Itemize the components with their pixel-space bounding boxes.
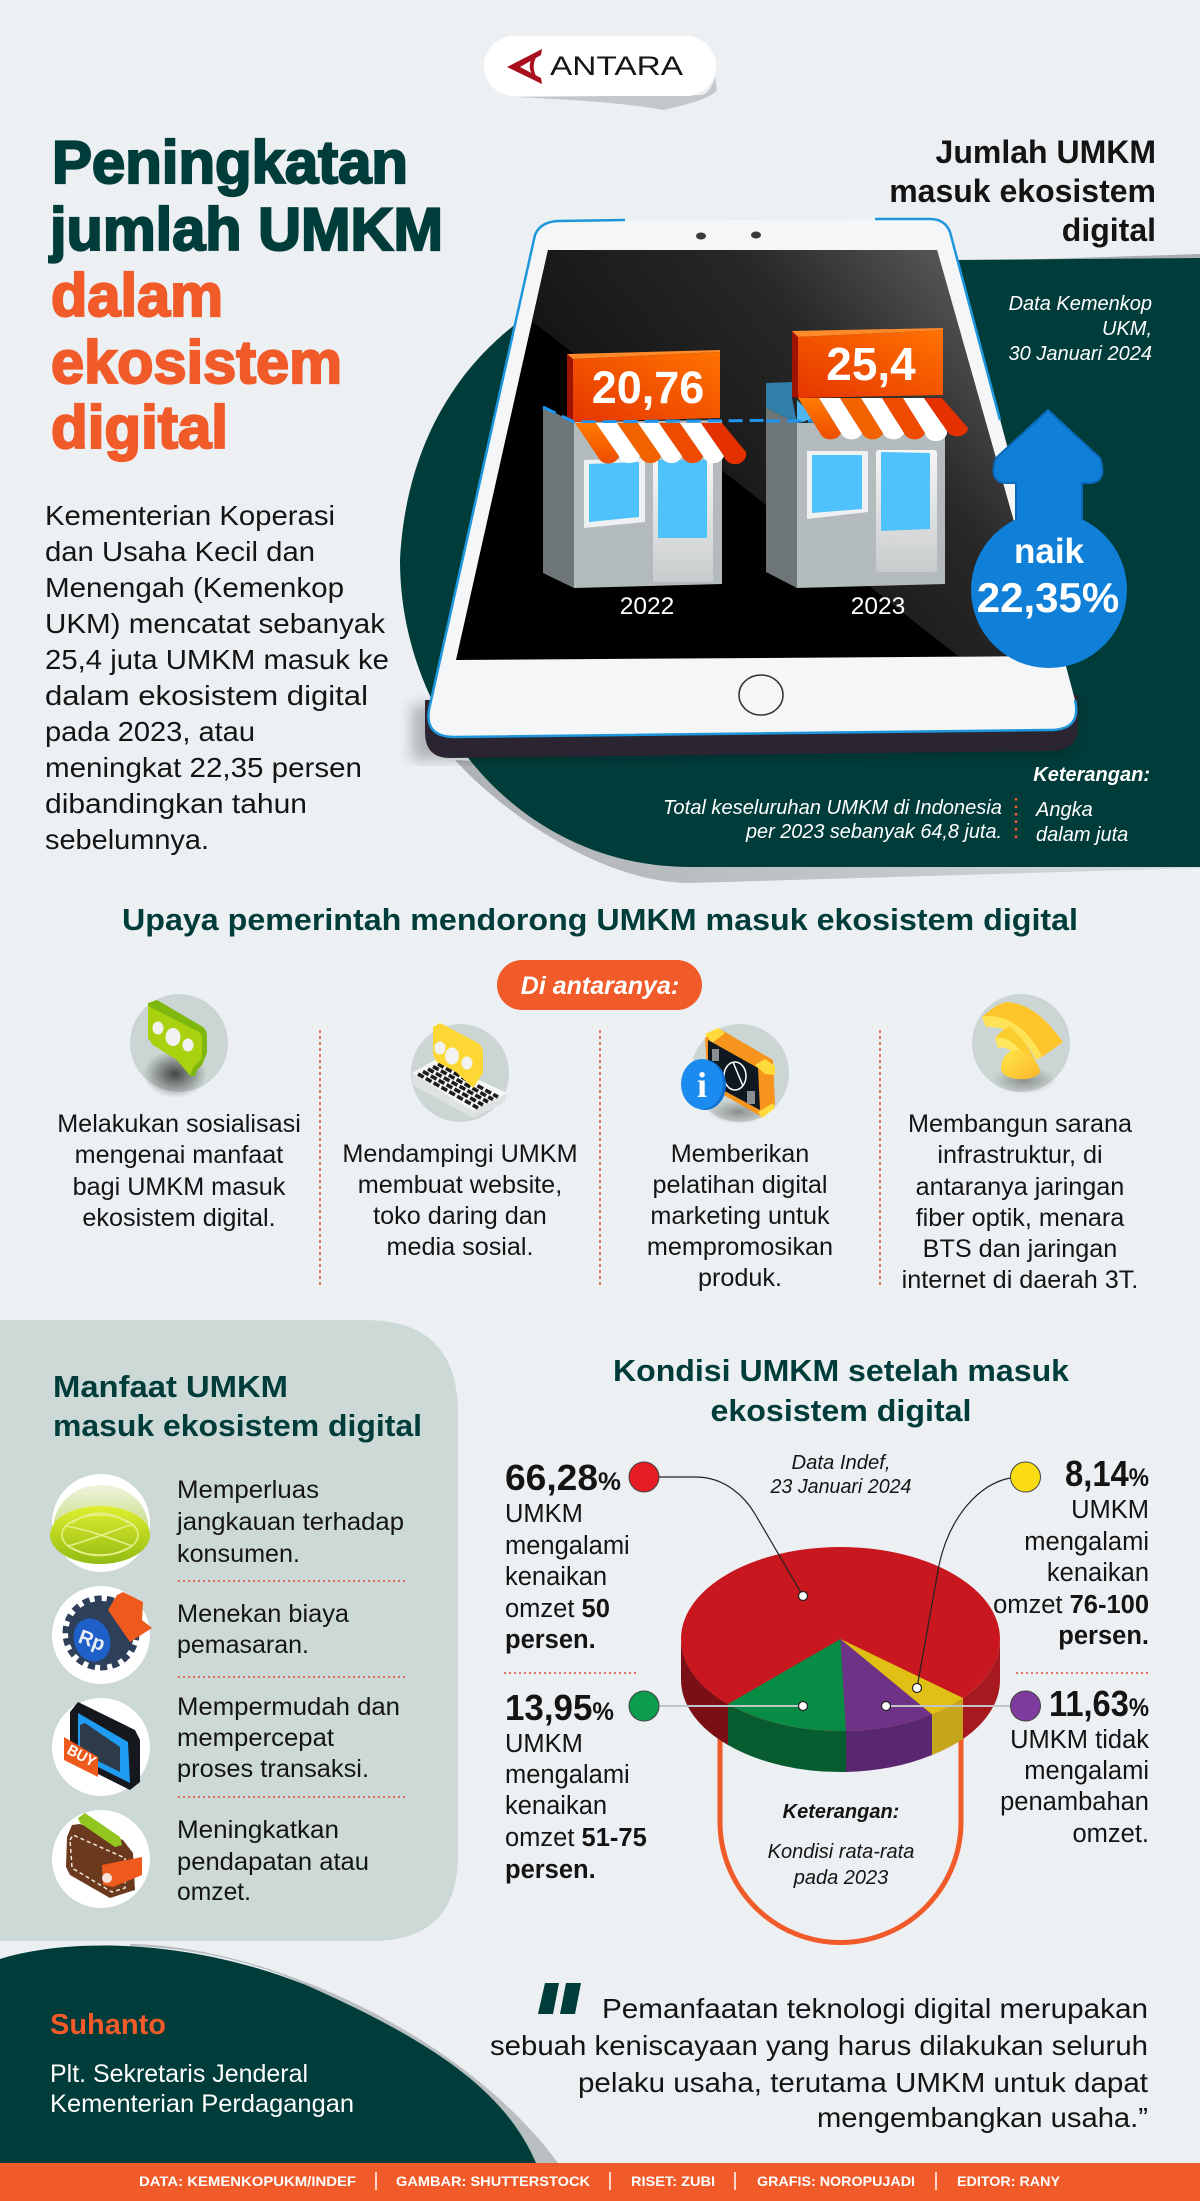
intro paragraph: Menengah (Kemenkop — [45, 572, 344, 603]
legend note — [663, 764, 1150, 846]
year: 2023: 2023 — [851, 593, 905, 620]
text: sosialisasi: mengenai manfaat — [75, 1141, 283, 1169]
text: website: membuat website, — [358, 1171, 562, 1199]
footer credits: EDITOR: RANY — [957, 2173, 1061, 2189]
orange legend loop: Keterangan: — [783, 1801, 899, 1823]
intro paragraph: Kementerian Koperasi — [45, 500, 335, 531]
stat: 8,14%: 8,14% — [1065, 1453, 1149, 1494]
source: indef: Data Indef, — [792, 1452, 890, 1474]
source note: Data Kemenkop — [1009, 293, 1152, 315]
main title — [49, 129, 443, 461]
heading: kondisi UMKM — [613, 1353, 1070, 1428]
intro paragraph: dibandingkan tahun — [45, 788, 307, 819]
stat: 13,95%: mengalami — [505, 1761, 630, 1789]
stat: 8,14%: omzet 76-100 — [993, 1591, 1149, 1619]
text: website — [342, 1140, 578, 1261]
chart heading: jumlah UMKM: masuk ekosistem — [889, 173, 1156, 209]
store: 2022 — [543, 350, 815, 620]
callout: naik 22,35%: 22,35% — [977, 574, 1119, 621]
section heading: upaya pemerintah: Upaya pemerintah mendorong UMKM masuk ekosistem digital — [122, 902, 1078, 937]
stat: 11,63% — [1000, 1683, 1149, 1848]
text: biaya: Menekan biaya — [177, 1600, 349, 1628]
text: pelatihan: produk. — [698, 1264, 782, 1292]
orange legend loop — [720, 1730, 961, 1943]
intro paragraph: UKM) mencatat sebanyak — [45, 608, 386, 639]
icon: globe — [50, 1474, 150, 1572]
value: 25,4: 25,4 — [826, 338, 916, 390]
text: infrastruktur — [902, 1110, 1138, 1294]
main title: digital — [51, 394, 228, 461]
chart heading: jumlah UMKM — [889, 134, 1156, 248]
icon: wallet — [52, 1810, 150, 1908]
year: 2022: 2022 — [620, 593, 674, 620]
intro paragraph — [45, 500, 389, 855]
text: pelatihan: marketing untuk — [650, 1202, 830, 1230]
stat: 8,14%: UMKM — [1071, 1496, 1149, 1524]
legend note: per 2023 sebanyak 64,8 juta. — [745, 821, 1002, 843]
stat: 8,14%: mengalami — [1024, 1528, 1149, 1556]
stat: 13,95%: omzet 51-75 — [505, 1824, 647, 1852]
stat: 66,28%: kenaikan — [505, 1563, 607, 1591]
speaker role — [50, 2060, 354, 2118]
footer credits: DATA: KEMENKOPUKM/INDEF — [139, 2173, 356, 2189]
stat: 66,28%: UMKM — [505, 1500, 583, 1528]
text: pelatihan: mempromosikan — [647, 1233, 833, 1261]
text: sosialisasi: bagi UMKM masuk — [73, 1173, 286, 1201]
stat: 11,63%: omzet. — [1072, 1820, 1149, 1848]
speaker role: Plt. Sekretaris Jenderal — [50, 2060, 308, 2088]
text: website: toko daring dan — [373, 1202, 547, 1230]
icon: digital marketing board: i — [697, 1065, 707, 1105]
stat: 11,63%: penambahan — [1000, 1788, 1149, 1816]
footer credits — [0, 2163, 1200, 2201]
icon: rupiah gear: Rp — [75, 1626, 108, 1656]
store: 2023 — [766, 328, 968, 620]
footer credits: RISET: ZUBI — [631, 2173, 715, 2189]
text: infrastruktur: internet di daerah 3T. — [902, 1266, 1138, 1294]
stat: 8,14% — [993, 1453, 1149, 1650]
source: indef: 23 Januari 2024 — [770, 1476, 912, 1498]
legend note: Keterangan: — [1033, 764, 1150, 786]
stat: 8,14%: kenaikan — [1047, 1559, 1149, 1587]
stat: 66,28%: mengalami — [505, 1532, 630, 1560]
stat: 66,28%: omzet 50 — [505, 1595, 610, 1623]
stat: 66,28%: persen. — [505, 1626, 596, 1654]
text: omzet: pendapatan atau — [177, 1848, 369, 1876]
stat: 11,63%: mengalami — [1024, 1757, 1149, 1785]
text: jangkauan: jangkauan terhadap — [176, 1508, 404, 1536]
text: biaya — [177, 1600, 349, 1659]
text: transaksi: mempercepat — [177, 1724, 334, 1752]
text: sosialisasi: ekosistem digital. — [82, 1204, 276, 1232]
stat: 13,95%: 13,95% — [505, 1687, 614, 1728]
icon: keyboard and bubble — [411, 1023, 509, 1122]
heading: manfaat: Manfaat UMKM — [53, 1369, 288, 1404]
speaker name: Suhanto — [50, 2009, 166, 2041]
pie chart — [681, 1547, 1000, 1772]
icon: chat bubble — [130, 994, 228, 1098]
text: infrastruktur: infrastruktur, di — [937, 1141, 1103, 1169]
text: transaksi: Mempermudah dan — [177, 1693, 400, 1721]
intro paragraph: 25,4 juta UMKM masuk ke — [45, 644, 389, 675]
legend note: Angka — [1035, 799, 1093, 821]
text: transaksi: proses transaksi. — [177, 1755, 369, 1783]
stat: 13,95% — [505, 1687, 659, 1884]
text: website: Mendampingi UMKM — [342, 1140, 578, 1168]
legend note: Total keseluruhan UMKM di Indonesia — [663, 797, 1002, 819]
footer credits: GAMBAR: SHUTTERSTOCK — [396, 2173, 590, 2189]
icon: phone and buy tag: BUY — [64, 1742, 99, 1771]
leader lines — [659, 1477, 1010, 1710]
chart heading: jumlah UMKM: digital — [1062, 212, 1156, 248]
source note: UKM, — [1102, 318, 1152, 340]
footer credits: GRAFIS: NOROPUJADI — [757, 2173, 915, 2189]
main title: jumlah UMKM — [49, 196, 443, 263]
main title: ekosistem — [51, 329, 342, 396]
text: infrastruktur: fiber optik, menara — [916, 1204, 1125, 1232]
orange legend loop: pada 2023 — [793, 1867, 888, 1889]
text: jangkauan — [176, 1476, 404, 1568]
text: website: media sosial. — [386, 1233, 534, 1261]
logo: Antara: ANTARA — [550, 51, 683, 81]
text: sosialisasi: Melakukan sosialisasi — [57, 1110, 301, 1138]
intro paragraph: dalam ekosistem digital — [45, 680, 368, 711]
value: 20,76: 20,76 — [592, 362, 704, 413]
icon: quote mark — [538, 1983, 581, 2014]
callout: naik 22,35%: naik — [1014, 532, 1085, 571]
heading: kondisi UMKM: ekosistem digital — [710, 1393, 972, 1428]
pill: di antaranya: Di antaranya: — [521, 972, 679, 1000]
text: omzet — [177, 1816, 369, 1906]
text: pelatihan: pelatihan digital — [652, 1171, 828, 1199]
heading: manfaat — [53, 1369, 422, 1443]
intro paragraph: dan Usaha Kecil dan — [45, 536, 315, 567]
quote text: pelaku usaha, terutama UMKM untuk dapat — [578, 2067, 1148, 2098]
intro paragraph: sebelumnya. — [45, 824, 209, 855]
stat: 13,95%: kenaikan — [505, 1792, 607, 1820]
speaker role: Kementerian Perdagangan — [50, 2090, 354, 2118]
text: jangkauan: Memperluas — [177, 1476, 319, 1504]
icon: wifi — [972, 994, 1070, 1094]
quote text — [490, 1993, 1148, 2133]
icon: digital marketing board — [681, 1024, 789, 1124]
text: infrastruktur: BTS dan jaringan — [923, 1235, 1117, 1263]
quote text: sebuah keniscayaan yang harus dilakukan seluruh — [490, 2030, 1148, 2061]
text: biaya: pemasaran. — [177, 1631, 309, 1659]
stat: 13,95%: persen. — [505, 1856, 596, 1884]
quote text: Pemanfaatan teknologi digital merupakan — [602, 1993, 1148, 2024]
icon: rupiah gear — [52, 1586, 152, 1684]
stat: 13,95%: UMKM — [505, 1730, 583, 1758]
icon: phone and buy tag — [52, 1698, 150, 1796]
heading: manfaat: masuk ekosistem digital — [53, 1408, 422, 1443]
text: pelatihan: Memberikan — [671, 1140, 809, 1168]
chart heading: jumlah UMKM: Jumlah UMKM — [936, 134, 1156, 170]
intro paragraph: meningkat 22,35 persen — [45, 752, 362, 783]
panel: speaker — [0, 1944, 558, 2163]
text: infrastruktur: Membangun sarana — [908, 1110, 1133, 1138]
text: infrastruktur: antaranya jaringan — [916, 1173, 1124, 1201]
logo: Antara — [484, 36, 717, 110]
stat: 66,28%: 66,28% — [505, 1457, 621, 1498]
source note — [1009, 293, 1152, 365]
intro paragraph: pada 2023, atau — [45, 716, 255, 747]
panel: dark green backdrop — [400, 254, 1200, 883]
legend note: dalam juta — [1036, 824, 1128, 846]
pill: di antaranya — [497, 960, 702, 1010]
source: indef — [770, 1452, 912, 1498]
text: jangkauan: konsumen. — [177, 1540, 300, 1568]
text: transaksi — [177, 1693, 400, 1783]
stat: 66,28% — [505, 1457, 659, 1654]
quote text: mengembangkan usaha.” — [817, 2102, 1148, 2133]
stat: 11,63%: 11,63% — [1049, 1683, 1149, 1724]
main title: Peningkatan — [52, 129, 408, 196]
panel: manfaat — [0, 1320, 458, 1941]
tablet — [412, 219, 1080, 760]
main title: dalam — [51, 262, 223, 329]
orange legend loop: Kondisi rata-rata — [768, 1841, 914, 1863]
text: pelatihan — [647, 1140, 833, 1292]
stat: 11,63%: UMKM tidak — [1010, 1726, 1149, 1754]
text: omzet: Meningkatkan — [177, 1816, 339, 1844]
heading: kondisi UMKM: Kondisi UMKM setelah masuk — [613, 1353, 1070, 1388]
stat: 8,14%: persen. — [1058, 1622, 1149, 1650]
text: omzet: omzet. — [177, 1878, 251, 1906]
text: sosialisasi — [57, 1110, 301, 1232]
callout: naik 22,35% — [971, 410, 1127, 668]
source note: 30 Januari 2024 — [1009, 343, 1152, 365]
